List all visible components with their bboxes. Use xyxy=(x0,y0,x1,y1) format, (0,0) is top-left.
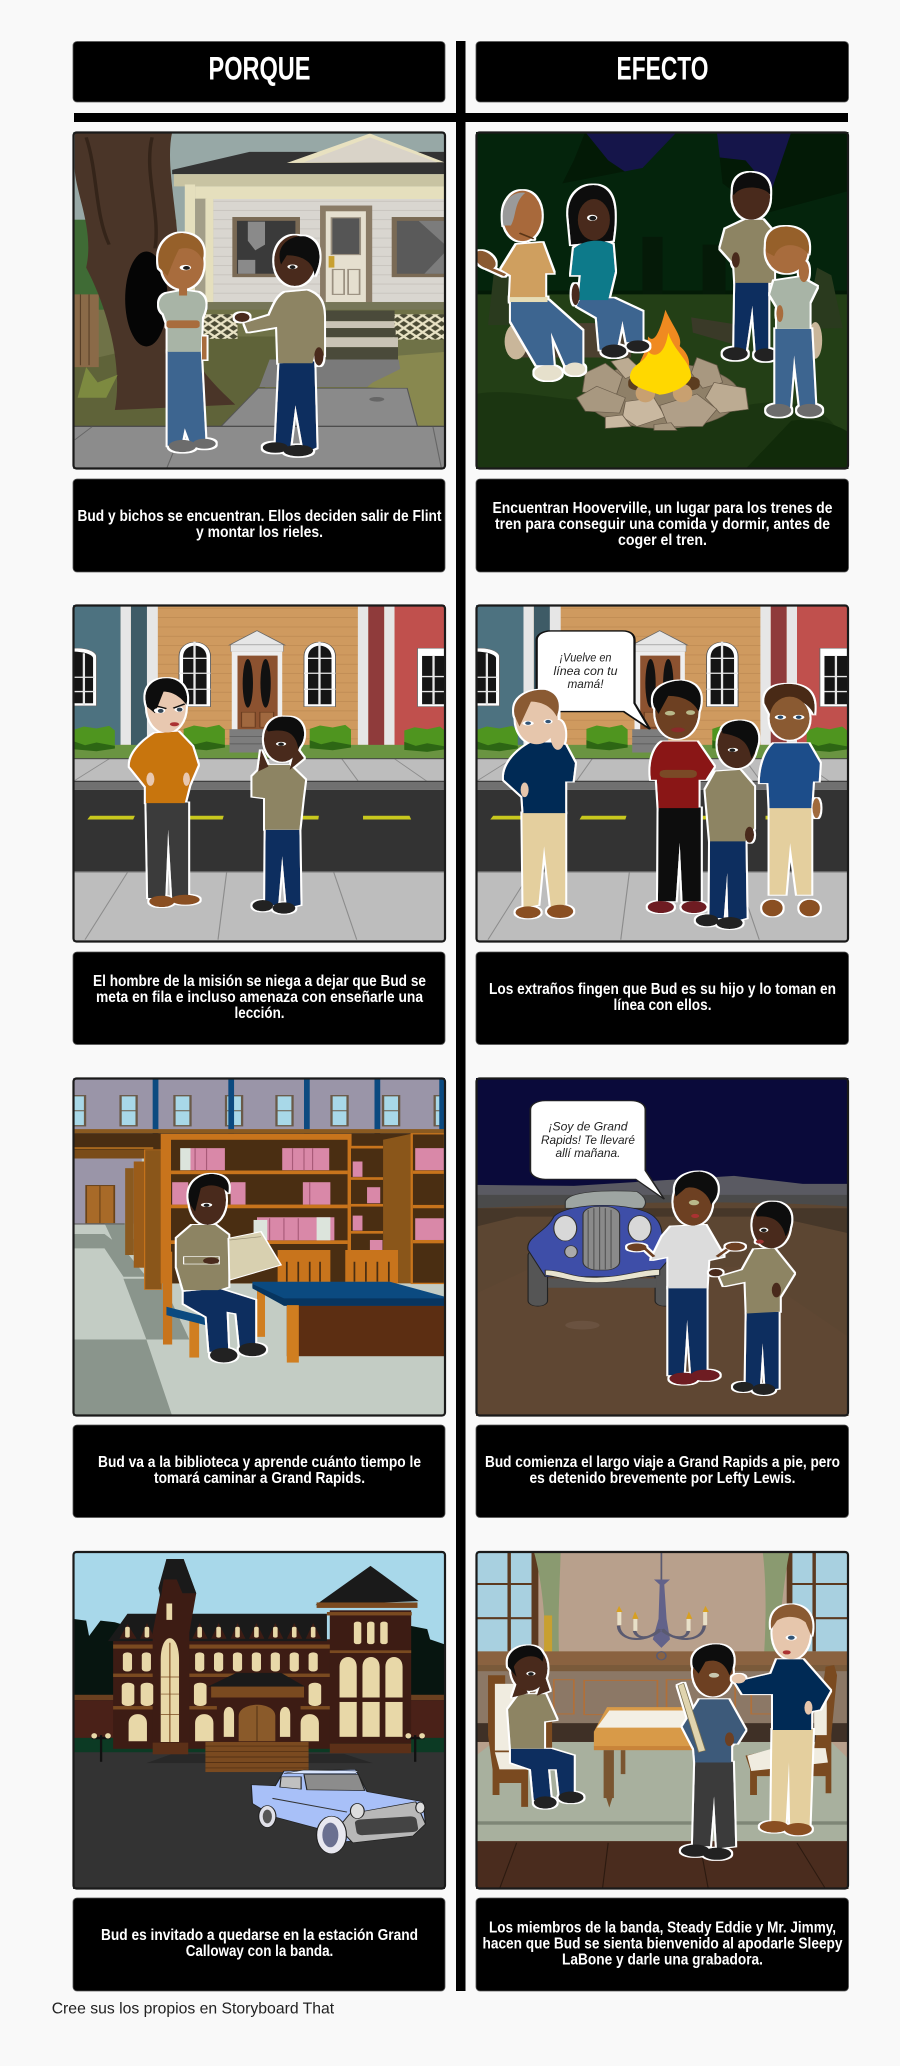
panel: cause 4, mansion xyxy=(73,1552,445,1889)
caption: cause 4: Bud es invitado a quedarse en la estación Grand xyxy=(101,1927,418,1944)
caption: cause 1: Bud y bichos se encuentran. Ellos deciden salir de Flint xyxy=(78,508,442,525)
panel: effect 2, street with speech bubble xyxy=(476,605,848,942)
heading: EFECTO: EFECTO xyxy=(616,50,708,86)
caption: effect 1: coger el tren. xyxy=(618,532,707,549)
speech text: Rapids! Te llevaré xyxy=(541,1133,635,1147)
heading: EFECTO xyxy=(476,42,848,102)
vintage car xyxy=(528,1191,675,1306)
character: woman xyxy=(568,185,649,358)
caption: effect 4 xyxy=(476,1898,848,1991)
caption: effect 1: Encuentran Hooverville, un lugar para los trenes de xyxy=(492,500,833,517)
character: standing man xyxy=(720,173,777,361)
caption: effect 2 xyxy=(476,952,848,1044)
panel: cause 3, library xyxy=(72,1078,451,1416)
panel: cause 2, street xyxy=(73,605,446,942)
caption: effect 2: línea con ellos. xyxy=(614,997,712,1014)
character: Bud worried xyxy=(252,717,305,914)
caption: cause 4 xyxy=(73,1898,445,1991)
caption: effect 3: Bud comienza el largo viaje a Grand Rapids a pie, pero xyxy=(485,1454,840,1471)
caption: cause 2 xyxy=(73,952,445,1044)
speech text xyxy=(541,1120,635,1160)
speech text: ¡Soy de Grand xyxy=(548,1120,628,1134)
character: Steady Eddie xyxy=(732,1604,830,1835)
speech text: mamá! xyxy=(568,677,604,691)
caption: effect 4: LaBone y darle una grabadora. xyxy=(562,1952,763,1968)
character: Bud seated with hands on cheeks xyxy=(508,1645,584,1809)
caption: cause 2: lección. xyxy=(234,1005,284,1022)
character: Bud in line xyxy=(696,720,758,929)
table xyxy=(594,1707,717,1808)
horizontal header divider xyxy=(74,113,848,122)
character: Bud reading xyxy=(177,1174,266,1363)
caption: cause 1: y montar los rieles. xyxy=(196,524,323,541)
caption: cause 2: meta en fila e incluso amenaza con enseñarle una xyxy=(96,989,423,1006)
campfire flames xyxy=(628,310,700,402)
caption: effect 1 xyxy=(476,479,848,572)
panel: effect 4, room with band xyxy=(476,1552,848,1889)
panel: effect 3, night road xyxy=(476,1078,848,1416)
character: Bugs thinking xyxy=(766,226,822,417)
caption: cause 1 xyxy=(73,479,445,572)
character: pale man xyxy=(504,690,575,918)
caption: effect 2: Los extraños fingen que Bud es su hijo y lo toman en xyxy=(489,981,836,998)
caption: cause 3: tomará caminar a Grand Rapids. xyxy=(154,1470,365,1487)
speech bubble xyxy=(537,631,650,729)
character: Sleepy LaBone with recorder xyxy=(678,1644,746,1860)
panel: cause 1, house and tree xyxy=(73,132,445,469)
heading: PORQUE xyxy=(73,42,445,102)
speech text: allí mañana. xyxy=(556,1146,620,1160)
speech text: ¡Vuelve en xyxy=(560,650,612,664)
caption: effect 3: es detenido brevemente por Lefty Lewis. xyxy=(530,1470,796,1487)
classic blue car xyxy=(251,1769,426,1854)
character: woman in blue xyxy=(760,684,820,916)
character: old man xyxy=(470,191,585,381)
caption: cause 4: Calloway con la banda. xyxy=(186,1943,333,1960)
caption: effect 4: hacen que Bud se sienta bienvenido al apodarle Sleepy xyxy=(482,1936,843,1952)
speech text: línea con tu xyxy=(554,664,618,678)
speech bubble xyxy=(530,1101,664,1199)
caption: cause 3: Bud va a la biblioteca y aprende cuánto tiempo le xyxy=(98,1454,421,1471)
character: Bud listening xyxy=(709,1202,794,1395)
heading: PORQUE: PORQUE xyxy=(208,50,310,86)
character: mission man xyxy=(130,678,200,907)
caption: cause 2: El hombre de la misión se niega a dejar que Bud se xyxy=(93,973,426,990)
character: boy in red xyxy=(648,681,714,913)
stone fire ring xyxy=(577,358,748,430)
footer credit: Cree sus los propios en Storyboard That xyxy=(52,2000,335,2018)
caption: effect 1: tren para conseguir una comida y dormir, antes de xyxy=(495,516,830,533)
street lamps xyxy=(91,1733,425,1762)
panel: effect 1, campfire xyxy=(470,132,848,469)
armchairs xyxy=(488,1665,837,1807)
character: Lefty Lewis xyxy=(627,1172,745,1385)
caption: effect 3 xyxy=(476,1425,848,1518)
character: Bugs xyxy=(158,233,216,452)
chandelier xyxy=(616,1552,709,1660)
speech text xyxy=(554,650,618,691)
centre vertical divider xyxy=(456,41,466,1991)
caption: cause 3 xyxy=(73,1425,445,1518)
character: Bud xyxy=(235,235,324,456)
open book xyxy=(228,1232,281,1280)
caption: effect 4: Los miembros de la banda, Steady Eddie y Mr. Jimmy, xyxy=(489,1920,836,1936)
